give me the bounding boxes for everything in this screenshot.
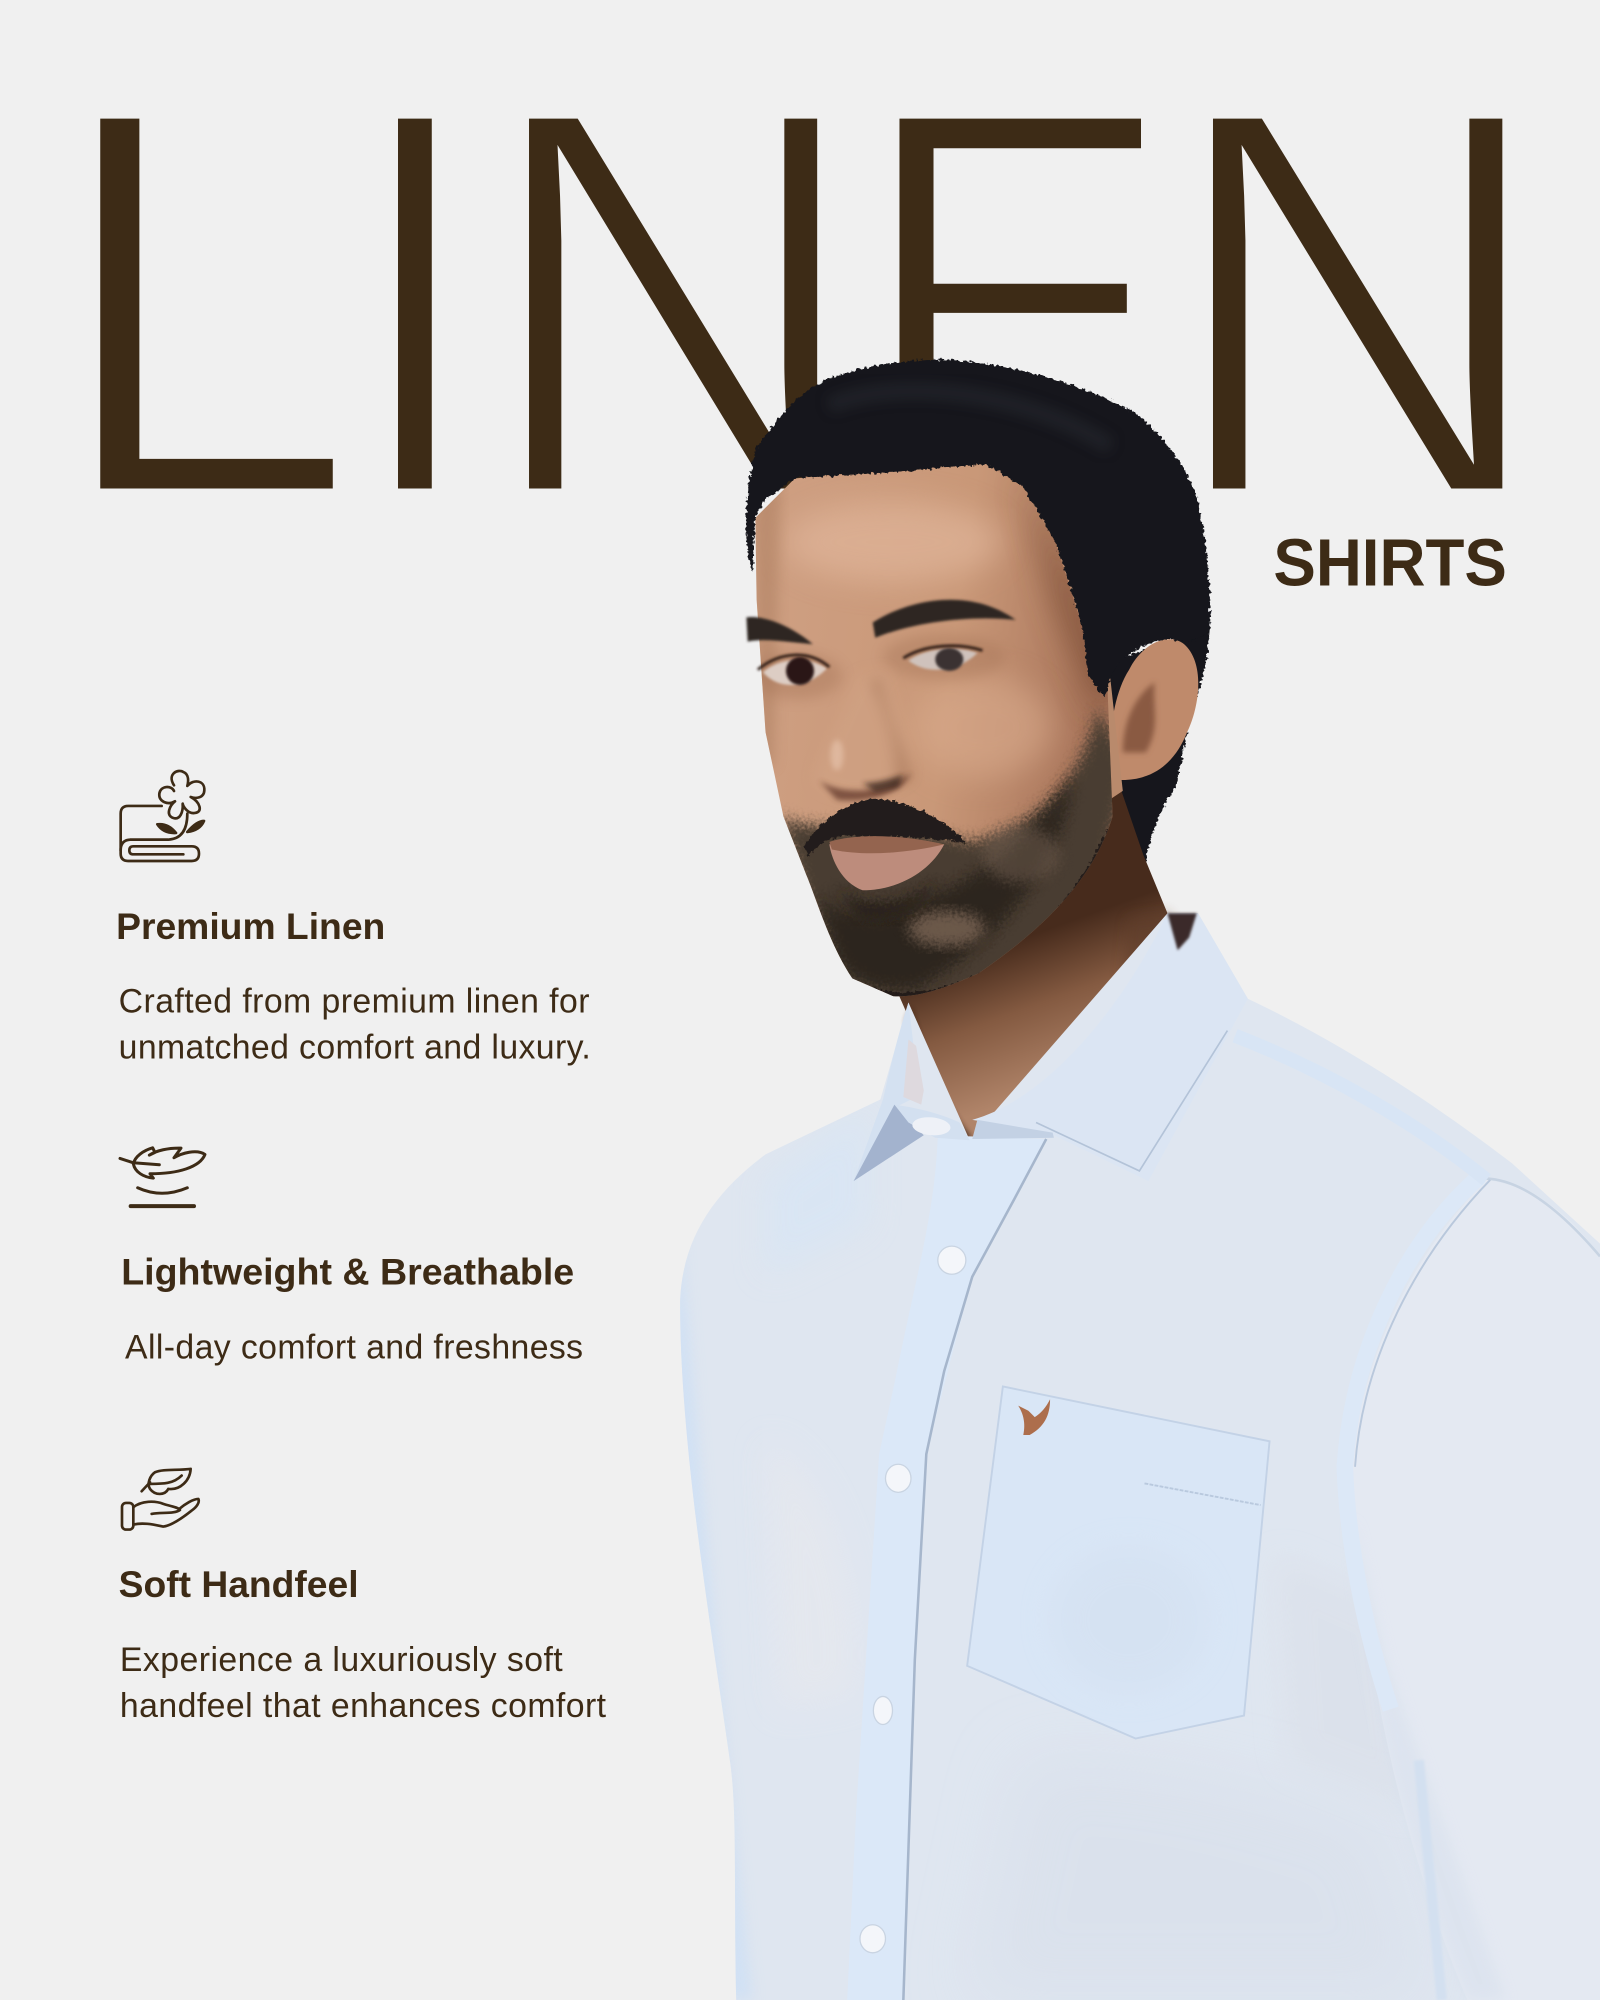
placket seam [903,1139,1046,2000]
shirt shading [663,1036,1600,2000]
icon: feather [120,1148,205,1206]
skin underlay below hair [766,453,1123,816]
body text: Crafted from premium linen for [119,983,589,1021]
subtitle: SHIRTS: SHIRTS [1273,526,1507,600]
feature: Premium Linen: unmatched comfort and luxury. [119,1029,591,1067]
title: LINEN: N [479,0,867,613]
feature: Soft Handfeel: handfeel that enhances comfort [120,1687,607,1725]
collar button [912,1116,951,1137]
title: LINEN [48,0,1553,614]
body text: All-day comfort and freshness [125,1328,583,1366]
buttons [860,1246,966,1953]
face [755,464,1113,996]
neck [893,765,1198,1148]
feature: Premium Linen [116,771,591,1067]
body text: Experience a luxuriously soft [120,1641,563,1679]
lips [829,839,944,890]
photo: model in linen shirt [663,360,1600,2000]
collar left inner [903,1040,924,1105]
eye sockets [753,653,842,699]
icon: towel and flower [121,771,204,861]
ear [1110,639,1198,780]
heading: Lightweight & Breathable [121,1251,574,1292]
inside collar band [894,1105,970,1140]
feature: Soft Handfeel [119,1469,607,1725]
collar right [972,913,1248,1181]
yoke seam [1486,1177,1488,1180]
face highlights [785,501,1002,583]
title: LINEN: L [48,0,358,613]
title: LINEN: N [1162,0,1553,614]
collar left [854,1003,921,1181]
eyes [763,660,827,685]
icon: hand with leaf [122,1469,199,1530]
hair [746,360,1210,699]
shirt body [680,913,1600,2000]
side seam [1419,1760,1442,2000]
placket [847,1135,1046,2000]
feature: Lightweight & Breathable [120,1148,583,1366]
logo [1018,1399,1050,1435]
heading: Premium Linen [116,906,385,947]
neck shadow [906,1008,972,1142]
neck hair at the back [1107,630,1210,871]
soul patch [836,880,938,919]
beard [781,708,1129,1014]
moustache [804,798,967,857]
title: LINEN: E [854,0,1177,613]
heading: Soft Handfeel [119,1564,359,1605]
sleeve seam band [1347,1550,1378,1694]
dark collar inside [1167,913,1197,950]
title: LINEN: I [348,0,482,614]
collar left underside [854,1105,924,1181]
sleeve [1352,1180,1600,2000]
nose [814,670,909,796]
eyebrows [746,617,813,644]
pocket [967,1386,1270,1739]
